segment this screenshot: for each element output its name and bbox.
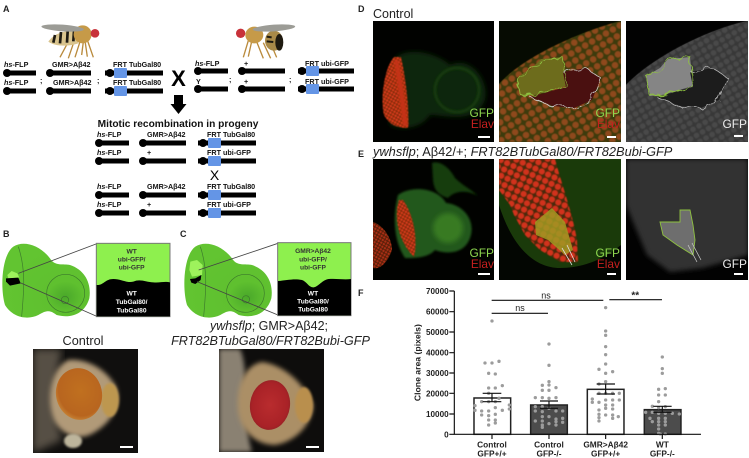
image: whole disc: Elav [471,257,494,271]
icon: male fly [236,23,295,58]
inset: clone boundary: TubGal80 [117,307,147,314]
panel B: control disc schematic [2,229,170,318]
image: clone merge: GFP [596,106,620,120]
inset: clone boundary: WT [126,291,137,298]
y-axis tick labels: 10000 [426,410,449,419]
panel D: control discs [358,4,748,142]
progeny genotypes: FRT ubi-GFP [207,200,251,209]
label C: C [180,229,187,239]
parental genotype: right: Y [196,77,201,86]
parental genotype: left: GMR>Aβ42 [53,78,92,87]
image: clone merge: GFP [596,246,620,260]
inset: clone boundary: TubGal80 [298,307,328,314]
eye-antennal disc [184,244,272,318]
inset: clone boundary: ubi-GFP [300,265,326,272]
heading: control: Control [373,7,413,21]
panel A: crossing scheme [3,4,354,218]
image: clone merge [499,21,621,142]
inset: clone boundary: TubGal80/ [297,299,329,306]
parental genotype: left: GMR>Aβ42 [52,60,91,69]
image: whole disc: GFP [470,246,494,260]
progeny genotypes: GMR>Aβ42 [147,182,186,191]
parental genotype: right: FRT ubi-GFP [305,77,349,86]
label B: B [3,229,10,239]
panel F: clone area bar chart [358,287,701,458]
image: clone merge: Elav [597,257,620,271]
inset: clone boundary: GMR>Aβ42 [295,248,331,255]
progeny genotypes: FRT ubi-GFP [207,148,251,157]
heading: mitotic recombination: Mitotic recombination in progeny [98,119,259,130]
panel C: Aβ42 disc schematic [171,229,370,348]
image: GFP channel: GFP [723,257,747,271]
progeny genotypes: hs-FLP [97,200,122,209]
progeny genotypes: GMR>Aβ42 [147,130,186,139]
inset: clone boundary: WT [126,249,137,256]
progeny genotypes [95,130,256,218]
image: GFP channel [626,159,748,280]
progeny genotypes: + [147,148,151,157]
image: whole disc [373,21,494,142]
progeny genotypes: hs-FLP [97,148,122,157]
progeny genotypes: FRT TubGal80 [207,182,255,191]
significance brackets: ns [541,290,551,300]
y-axis tick labels: 70000 [426,287,449,296]
significance brackets: ** [631,290,639,301]
scale bar [306,446,319,448]
parental genotype: right: hs-FLP [195,59,220,68]
photo: Aβ42 fly eye [219,349,324,452]
label A: A [3,4,10,14]
progeny genotypes: hs-FLP [97,130,122,139]
image: GFP channel [626,21,748,142]
image: GFP channel: GFP [723,117,747,131]
parental genotype: right: ; [229,75,231,84]
inset: clone boundary: ubi-GFP/ [299,257,327,264]
image: whole disc: GFP [470,106,494,120]
progeny genotypes: hs-FLP [97,182,122,191]
y-axis tick labels: 60000 [426,308,449,317]
parental genotype: left: ; [40,76,42,85]
x-axis labels [477,439,675,458]
scale bar [120,446,133,448]
y-axis tick labels: 20000 [426,389,449,398]
eye-antennal disc [2,244,90,318]
y-axis tick labels: 50000 [426,328,449,337]
parental genotype: left [3,60,163,96]
progeny genotypes: X [210,167,220,183]
x-axis labels: Control [477,439,507,449]
parental genotype: left: hs-FLP [4,78,29,87]
y-axis tick labels: 0 [444,430,449,439]
inset: clone boundary: ubi-GFP [119,265,145,272]
progeny genotypes: + [147,200,151,209]
inset: clone boundary: TubGal80/ [116,299,148,306]
x-axis labels: WT [656,439,669,449]
parental genotype: right [194,59,354,94]
caption: control: Control [63,334,103,348]
x-axis labels: Control [534,439,564,449]
image: clone merge: Elav [597,117,620,131]
cross symbol: X [171,66,186,91]
error bars [483,384,672,412]
y-axis tick labels [426,287,449,439]
parental genotype: right: + [244,59,248,68]
panel E: Aβ42 discs [358,144,748,280]
parental genotype: left: hs-FLP [4,60,29,69]
inset: clone boundary: WT [308,290,318,297]
data points [473,306,681,436]
panel C: Aβ42 disc schematic: FRT82BTubGal80/FRT82Bubi-GFP [171,334,370,348]
bars [474,389,681,434]
icon: female fly [41,23,99,58]
y-axis tick labels: 40000 [426,349,449,358]
inset: clone boundary [96,243,170,317]
parental genotype: left: FRT TubGal80 [113,60,161,69]
label F: F [358,288,364,298]
inset: clone boundary: ubi-GFP/ [118,257,146,264]
parental genotype: right: FRT ubi-GFP [305,59,349,68]
x-axis labels: GMR>Aβ42 [583,439,628,449]
parental genotype: right: + [244,77,248,86]
parental genotype: left: ; [97,76,99,85]
heading: genotype: ywhsflp; Aβ42/+; FRT82BTubGal80/FRT82Bubi-GFP [372,144,673,159]
y-axis tick labels: 30000 [426,369,449,378]
image: whole disc: Elav [471,117,494,131]
image: clone merge [499,159,621,280]
y-axis title: Clone area (pixels) [413,324,423,401]
image: whole disc [373,159,494,280]
photo: control fly eye [33,349,138,453]
parental genotype: right: ; [289,75,291,84]
label E: E [358,149,364,159]
genotype caption: ywhsflp; GMR>Aβ42; [209,319,328,333]
arrow: down [170,95,186,114]
parental genotype: left: FRT TubGal80 [113,78,161,87]
significance brackets: ns [515,303,525,313]
label D: D [358,4,365,14]
axes [449,291,701,439]
progeny genotypes: FRT TubGal80 [207,130,255,139]
inset: clone boundary [278,243,351,316]
significance brackets [492,290,662,313]
